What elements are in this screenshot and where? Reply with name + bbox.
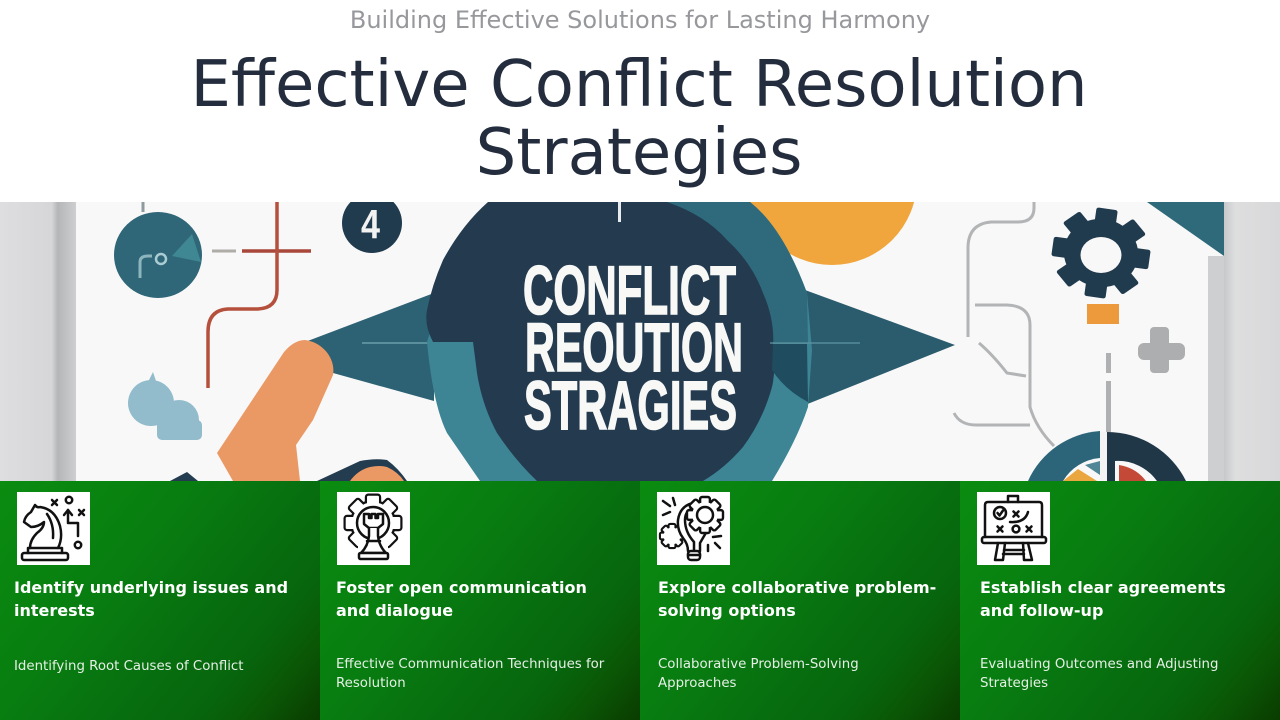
icon: lightbulb with gears [657, 492, 730, 565]
orange arm shape [217, 340, 333, 481]
panel: collaborative problem solving [640, 481, 960, 720]
heading [658, 578, 936, 620]
title [190, 48, 1088, 190]
number badge [342, 193, 402, 253]
description: Collaborative Problem-Solving [658, 657, 859, 672]
central lettering: STRAGIES [524, 367, 737, 444]
number badge: 4 [361, 202, 380, 247]
dashed indicator line [1106, 353, 1111, 433]
heading: Establish clear agreements [980, 578, 1226, 597]
heading: Foster open communication [336, 578, 587, 597]
grey circuit lines [954, 202, 1054, 446]
heading [336, 578, 587, 620]
description: Resolution [336, 676, 406, 691]
central lettering: CONFLICT [523, 252, 736, 329]
description: Identifying Root Causes of Conflict [14, 659, 243, 674]
teal dial [114, 202, 202, 298]
heading [980, 578, 1226, 620]
red and grey connector lines [208, 202, 311, 388]
hero illustration [0, 202, 1280, 481]
right arrow overlap [772, 344, 808, 402]
icon: chess knight strategy [17, 492, 90, 565]
description: Effective Communication Techniques for [336, 657, 604, 672]
heading: solving options [658, 601, 796, 620]
right arrow highlight [770, 342, 860, 344]
description [980, 657, 1218, 691]
panel: identify issues [0, 481, 320, 720]
description [658, 657, 859, 691]
description: Approaches [658, 676, 736, 691]
icon: gear with rook [337, 492, 410, 565]
grey plus [1138, 327, 1185, 373]
description: Evaluating Outcomes and Adjusting [980, 657, 1218, 672]
title: Strategies [476, 116, 802, 190]
central lettering [523, 252, 743, 444]
heading: Explore collaborative problem- [658, 578, 936, 597]
central lettering: REOUTION [525, 309, 743, 386]
heading: interests [14, 601, 95, 620]
dark swoosh [170, 459, 407, 481]
orange semicircle [747, 95, 917, 265]
panel: agreements and follow-up [960, 481, 1280, 720]
panel: open communication [320, 481, 640, 720]
subtitle: Building Effective Solutions for Lasting Harmony [350, 6, 930, 34]
backdrop wall and board [0, 202, 1280, 481]
gear icon [1046, 202, 1156, 304]
icon: strategy board [977, 492, 1050, 565]
blue blob [128, 372, 202, 440]
description: Strategies [980, 676, 1048, 691]
left arrow [305, 293, 434, 401]
heading: and follow-up [980, 601, 1103, 620]
title: Effective Conflict Resolution [190, 48, 1088, 122]
orange block [1087, 304, 1119, 324]
donut chart [1028, 431, 1186, 481]
heading: Identify underlying issues and [14, 578, 288, 597]
small tick [618, 202, 621, 222]
right arrow [805, 290, 955, 405]
central dark shape [426, 202, 774, 481]
corner triangle [1147, 202, 1224, 256]
description [336, 657, 604, 691]
heading: and dialogue [336, 601, 453, 620]
central teal ring [427, 202, 812, 481]
heading [14, 578, 288, 620]
